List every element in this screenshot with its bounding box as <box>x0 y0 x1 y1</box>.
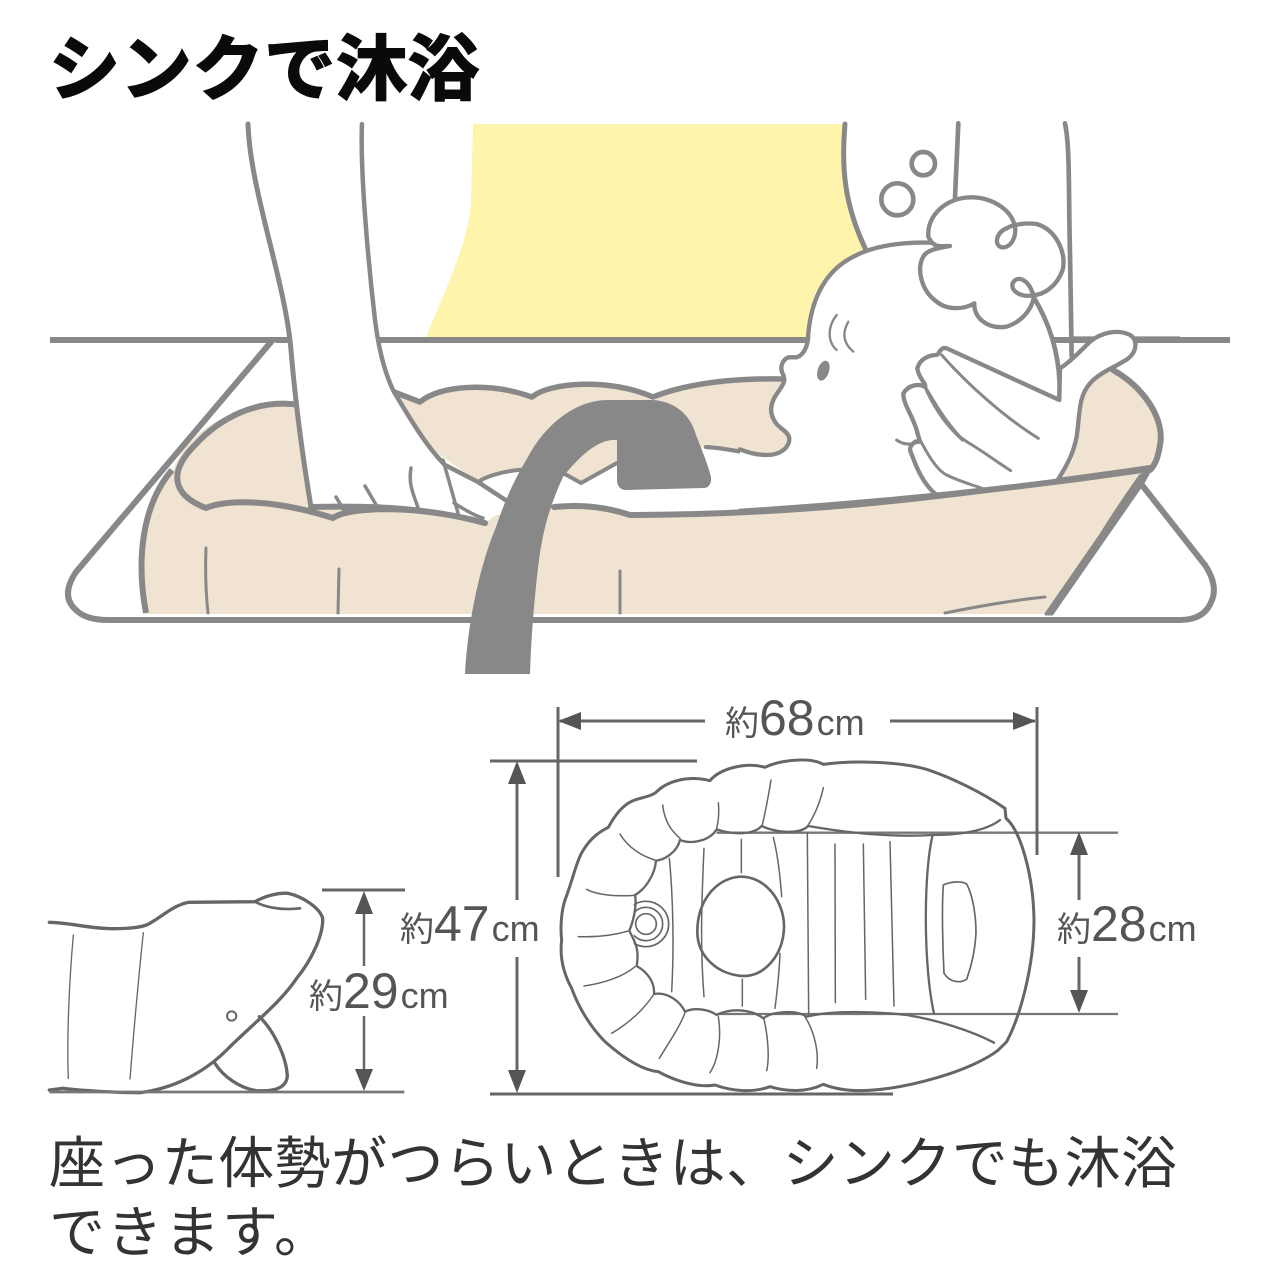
tub right rim <box>1113 370 1161 470</box>
valve <box>227 1011 236 1021</box>
shirt side line <box>844 124 865 248</box>
bumper line over hand <box>311 507 485 523</box>
tub back section <box>142 368 1159 614</box>
tub front rim <box>554 468 1150 515</box>
back of head <box>1033 297 1060 400</box>
faucet <box>465 400 711 674</box>
caregiver hand <box>903 332 1135 495</box>
tub side creases <box>68 933 143 1079</box>
dimension 29cm <box>309 890 449 1091</box>
ear lines <box>830 315 853 352</box>
baby body lines <box>478 442 790 483</box>
dimension 29cm: 約29cm <box>309 963 449 1019</box>
head <box>740 243 1080 497</box>
seat hole <box>697 877 784 976</box>
inner bumper edge <box>629 820 1000 1043</box>
front rim over hand <box>740 469 1150 512</box>
tub right wedge <box>1046 470 1150 614</box>
tub outline <box>561 760 1034 1091</box>
dimension 68cm: 約68cm <box>725 690 865 746</box>
tub top lip <box>255 902 300 909</box>
counter line <box>50 337 1230 343</box>
dimension 47cm <box>400 761 893 1094</box>
caregiver other arm <box>955 123 1072 357</box>
dimension 28cm <box>1057 832 1197 1013</box>
sink outline <box>68 342 1214 620</box>
bubbles <box>881 152 935 215</box>
dimension 68cm <box>558 690 1037 877</box>
mat ribs and bumper creases <box>578 780 894 1073</box>
caption <box>49 1132 1177 1264</box>
tub foot <box>215 1017 287 1091</box>
finger lines <box>336 460 483 518</box>
tub back rim <box>394 379 785 402</box>
title: シンクで沐浴 <box>49 31 479 110</box>
baby head, hand and foam <box>740 123 1180 512</box>
hand lines <box>897 355 1038 490</box>
caption: 座った体勢がつらいときは、シンクでも沐浴 <box>49 1132 1177 1195</box>
drain slot <box>942 882 976 982</box>
tub left rim and bumper <box>177 404 485 523</box>
baseline <box>49 1088 404 1096</box>
top view horizontal guides <box>717 833 1118 1014</box>
faucet hose line overlap <box>706 447 763 455</box>
illustration: bathing baby in the sink <box>50 123 1230 674</box>
dimension 28cm: 約28cm <box>1057 896 1197 952</box>
baby body <box>429 400 1073 515</box>
eye <box>815 359 832 382</box>
counter stub <box>1073 330 1180 348</box>
tub front <box>142 468 1150 614</box>
tub creases <box>206 548 1045 613</box>
shirt of caregiver <box>424 124 866 342</box>
tub side outline <box>49 893 323 1093</box>
dimensions: top view <box>561 760 1118 1091</box>
caption: できます。 <box>49 1201 330 1264</box>
dimension 47cm: 約47cm <box>400 896 540 952</box>
valve <box>634 900 670 948</box>
finger shadow <box>925 387 963 440</box>
back edge <box>926 835 934 1013</box>
arm of caregiver <box>248 124 510 523</box>
tub outer left edge <box>142 470 172 613</box>
foam <box>920 197 1064 327</box>
dimensions: side view <box>49 893 404 1093</box>
